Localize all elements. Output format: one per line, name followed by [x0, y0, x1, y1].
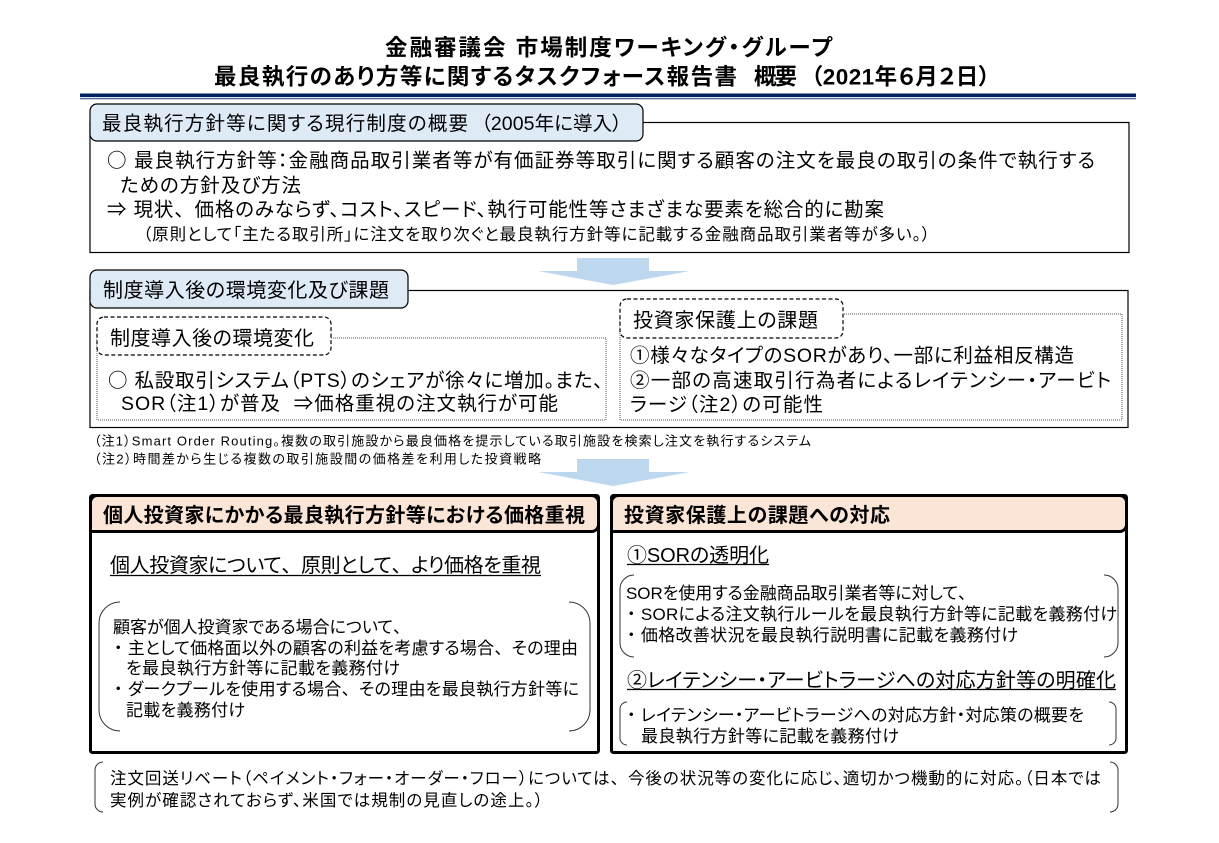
heading: response to investor protection issues	[612, 496, 1126, 532]
text block: PTS share: SOR（注1）が普及 ⇒価格重視の注文執行が可能	[121, 393, 558, 415]
subheading: price emphasis in principle: 個人投資家について、原則として、より価格を重視	[110, 554, 541, 577]
text block: issues list: ①様々なタイプのSORがあり、一部に利益相反構造	[630, 345, 1074, 367]
text block: definition of best execution policy: ⇒ 現状、価格のみならず、コスト、スピード、執行可能性等さまざまな要素を総合的に勘案	[107, 198, 884, 221]
heading tab: environment changes and issues	[90, 270, 408, 308]
title: （2021年６月２日）	[811, 64, 990, 90]
text block: PTS share: ○ 私設取引システム（PTS）のシェアが徐々に増加。また、	[108, 364, 603, 393]
bracket box: latency arbitrage obligations: ・ レイテンシー・アービトラージへの対応方針・対応策の概要を	[627, 706, 1084, 725]
dashed tab: investor protection issues	[620, 299, 843, 338]
text block: issues list: ラージ（注2）の可能性	[630, 394, 823, 416]
heading: response to investor protection issues: 投資家保護上の課題への対応	[624, 504, 890, 527]
bracket box: SOR obligations: SORを使用する金融商品取引業者等に対して、	[626, 583, 975, 603]
heading tab: current system overview: （2005年に導入）	[481, 113, 622, 135]
bracket box: retail investor obligations: ・ ダークプールを使用する場合、その理由を最良執行方針等に	[114, 679, 579, 699]
text block: PTS share	[108, 364, 603, 415]
panel: environment changes and issues	[90, 270, 1128, 428]
sub-panel: investor protection issues	[620, 299, 1122, 420]
panel: current system overview	[90, 104, 1129, 252]
sub-panel: environment changes	[97, 317, 606, 420]
note: payment for order flow: 実例が確認されておらず、米国では規制の見直しの途上。）	[110, 791, 543, 810]
text block: issues list: ②一部の高速取引行為者によるレイテンシー・アービト	[630, 370, 1111, 392]
bracket box: latency arbitrage obligations	[620, 702, 1116, 746]
bracket box: SOR obligations: ・ 価格改善状況を最良執行説明書に記載を義務付け	[627, 626, 1018, 645]
subheading: latency arbitrage policy: ②レイテンシー・アービトラージへの対応方針等の明確化	[627, 669, 1116, 692]
arrow: down to responses	[538, 459, 690, 486]
panel: response to investor protection issues	[612, 496, 1126, 752]
text block: definition of best execution policy: （原則として「主たる取引所」に注文を取り次ぐと最良執行方針等に記載する金融商品取引業者等が多い。）	[143, 225, 930, 244]
note: payment for order flow	[95, 762, 1118, 812]
title: 概要	[754, 64, 797, 90]
panel: retail investors price emphasis	[90, 496, 598, 752]
bracket box: retail investor obligations: ・ 主として価格面以外の顧客の利益を考慮する場合、その理由	[114, 639, 578, 658]
heading tab: current system overview: 最良執行方針等に関する現行制度の概要	[102, 113, 468, 135]
subheading: SOR transparency: ①SORの透明化	[627, 544, 769, 567]
bracket box: retail investor obligations: 顧客が個人投資家である場合について、	[113, 618, 410, 637]
title: 金融審議会 市場制度ワーキング・グループ	[385, 34, 834, 60]
dashed tab: investor protection issues: 投資家保護上の課題	[633, 309, 818, 332]
footnotes: （注1）Smart Order Routing。複数の取引施設から最良価格を提示している取引施設を検索し注文を執行するシステム	[94, 434, 811, 448]
heading tab: current system overview	[90, 104, 643, 141]
note: payment for order flow: 注文回送リベート（ペイメント・フォー・オーダー・フロー）については、今後の状況等の変化に応じ、適切かつ機動的に対応。（日本では	[110, 769, 1101, 788]
text block: issues list	[630, 345, 1111, 416]
dashed tab: environment changes: 制度導入後の環境変化	[110, 327, 314, 350]
footnotes: （注2）時間差から生じる複数の取引施設間の価格差を利用した投資戦略	[94, 452, 541, 466]
heading: retail investors price emphasis	[90, 496, 598, 532]
text block: definition of best execution policy	[107, 144, 1095, 244]
heading: retail investors price emphasis: 個人投資家にかかる最良執行方針等における価格重視	[103, 504, 585, 527]
title	[214, 34, 990, 90]
arrow: down to environment changes	[538, 258, 690, 285]
bracket box: latency arbitrage obligations: 最良執行方針等に記載を義務付け	[641, 727, 899, 746]
bracket box: retail investor obligations: を最良執行方針等に記載を義務付け	[126, 659, 400, 678]
heading tab: environment changes and issues: 制度導入後の環境変化及び課題	[103, 279, 389, 302]
dashed tab: environment changes	[97, 317, 331, 355]
footnotes	[94, 434, 811, 466]
text block: definition of best execution policy: ○ 最良執行方針等：金融商品取引業者等が有価証券等取引に関する顧客の注文を最良の取引の条件で執行する	[107, 144, 1095, 173]
bracket box: SOR obligations	[620, 575, 1118, 657]
text block: definition of best execution policy: ための方針及び方法	[120, 175, 301, 197]
bracket box: retail investor obligations: 記載を義務付け	[126, 701, 245, 720]
bracket box: SOR obligations: ・ SORによる注文執行ルールを最良執行方針等に記載を義務付け	[627, 605, 1117, 624]
title: 最良執行のあり方等に関するタスクフォース報告書	[214, 64, 737, 90]
title rule	[80, 94, 1136, 99]
bracket box: retail investor obligations	[99, 602, 590, 731]
